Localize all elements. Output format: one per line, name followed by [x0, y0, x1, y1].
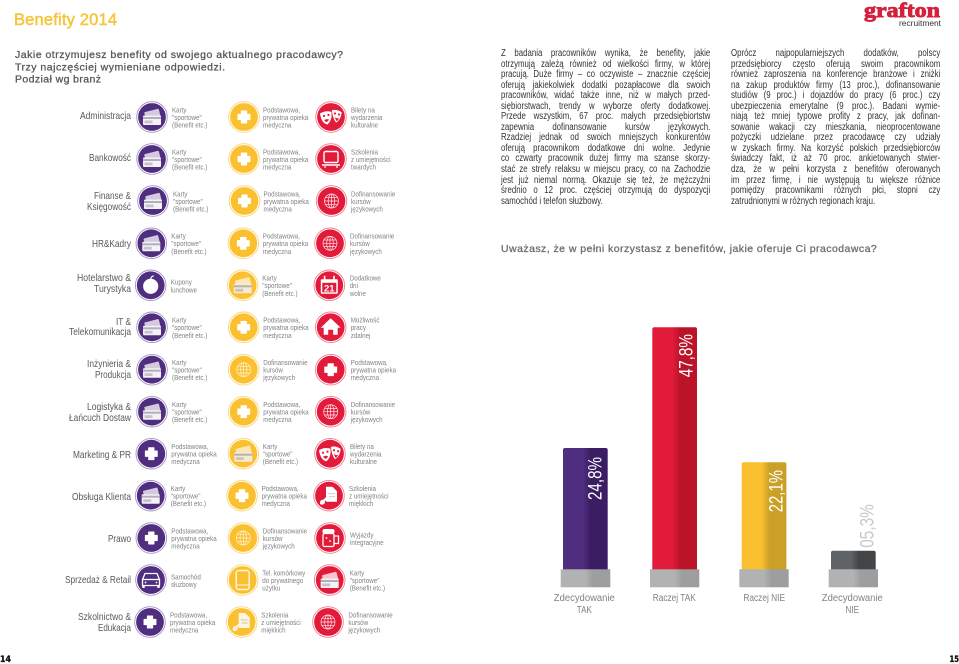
- row: HR&Kadry: [92, 228, 394, 259]
- row: Prawo: Wyjazdy: [350, 532, 374, 540]
- row: Administracja: Podstawowa,: [263, 107, 300, 114]
- bar: Zdecydowanie TAK 24,8%: TAK: [577, 605, 592, 616]
- heading: survey question: [15, 49, 343, 86]
- row: HR&Kadry: Podstawowa,: [263, 233, 300, 241]
- bar: Zdecydowanie NIE 05,3%: Zdecydowanie: [822, 593, 883, 604]
- row: HR&Kadry: medyczna: [263, 248, 291, 256]
- text block: additional benefits: w zyskach firmy. Na korzyść polskich przedsiębiorców: [731, 143, 940, 154]
- row: Sprzedaż & Retail: Sprzedaż & Retail: [65, 575, 131, 586]
- text block: company size findings: Rzadziej jednak od swoich mniejszych konkurentów: [501, 132, 710, 143]
- text block: additional benefits: pożyczki udzielane przez pracodawcę czy udziały: [731, 132, 940, 143]
- row: Marketing & PR: medyczna: [171, 459, 200, 466]
- row: Obsługa Klienta: [72, 480, 389, 511]
- row: Administracja: [80, 102, 383, 132]
- row: Administracja: wydarzenia: [350, 114, 383, 122]
- row: Sprzedaż & Retail: służbowy: [171, 582, 197, 589]
- row: Logistyka & Łańcuch Dostaw: Podstawowa,: [263, 402, 300, 409]
- bar: Zdecydowanie TAK 24,8%: Zdecydowanie: [554, 593, 615, 604]
- row: Logistyka & Łańcuch Dostaw: językowych: [350, 417, 383, 424]
- row: Obsługa Klienta: Karty: [171, 486, 186, 493]
- bar: Raczej NIE 22,1%: [739, 462, 789, 604]
- text block: company size findings: Przede wszystkim, 67 proc. małych przedsiębiortstw: [501, 111, 710, 122]
- row: Finanse & Księgowość: [87, 186, 395, 216]
- text block: company size findings: siębiorstwach, trendy w wyborze oferty dodatkowej.: [501, 101, 710, 112]
- row: Finanse & Księgowość: językowych: [350, 206, 383, 214]
- row: Bankowość: medyczna: [263, 164, 291, 172]
- row: Bankowość: z umiejętności: [351, 156, 391, 164]
- row: Prawo: integracyjne: [350, 540, 384, 547]
- row: Logistyka & Łańcuch Dostaw: Dofinansowanie: [351, 402, 395, 409]
- text block: additional benefits: na zakup produktów firmy (13 proc.), dofinansowanie: [731, 80, 940, 91]
- row: Hotelarstwo & Turystyka: "sportowe": [262, 283, 292, 290]
- text block: additional benefits: zatrudnionymi w różnych regionach kraju.: [731, 196, 875, 207]
- row: Inżynieria & Produkcja: kursów: [263, 367, 284, 375]
- row: Inżynieria & Produkcja: medyczna: [351, 375, 379, 382]
- row: Prawo: Podstawowa,: [171, 528, 208, 535]
- row: Prawo: językowych: [262, 543, 295, 551]
- row: Inżynieria & Produkcja: Karty: [172, 360, 187, 367]
- heading: chart question: Uważasz, że w pełni korzystasz z benefitów, jakie oferuje Ci pracodawca?: [501, 243, 877, 255]
- logo: grafton recruitment: recruitment: [899, 18, 942, 28]
- row: Hotelarstwo & Turystyka: dni: [350, 283, 358, 290]
- row: Szkolnictwo & Edukacja: kursów: [348, 619, 369, 627]
- heading: survey question: Jakie otrzymujesz benefity od swojego aktualnego pracodawcy?: [15, 49, 343, 61]
- row: Bankowość: Karty: [172, 149, 187, 156]
- bar: Raczej NIE 22,1%: 22,1%: [766, 470, 787, 512]
- row: Logistyka & Łańcuch Dostaw: kursów: [351, 409, 371, 417]
- row: Bankowość: (Benefit etc.): [172, 164, 207, 172]
- row: Prawo: prywatna opieka: [171, 535, 217, 543]
- row: Finanse & Księgowość: Księgowość: [87, 202, 131, 213]
- text block: additional benefits: ubezpieczenia emerytalne (9 proc.). Badani wymie-: [731, 101, 940, 112]
- row: Marketing & PR: wydarzenia: [349, 451, 382, 459]
- text block: company size findings: zapewnia dofinansowanie kursów językowych.: [501, 122, 710, 133]
- row: Bankowość: Bankowość: [89, 153, 131, 164]
- row: Finanse & Księgowość: Finanse &: [94, 191, 131, 202]
- row: Bankowość: "sportowe": [172, 156, 202, 164]
- row: Szkolnictwo & Edukacja: Dofinansowanie: [348, 612, 393, 619]
- row: Inżynieria & Produkcja: Inżynieria &: [87, 359, 131, 370]
- row: Szkolnictwo & Edukacja: z umiejętności: [261, 619, 301, 627]
- row: Bankowość: Szkolenia: [351, 149, 378, 156]
- row: Hotelarstwo & Turystyka: Hotelarstwo &: [77, 273, 131, 284]
- text block: additional benefits: im przez firmę, i nie występują tu większe różnice: [731, 175, 940, 186]
- row: Finanse & Księgowość: kursów: [351, 198, 372, 206]
- row: IT & Telekomunikacja: Karty: [172, 317, 187, 325]
- row: Administracja: kulturalne: [351, 122, 378, 130]
- row: IT & Telekomunikacja: medyczna: [263, 332, 292, 340]
- row: IT & Telekomunikacja: Możliwość: [351, 317, 380, 325]
- row: Administracja: Karty: [172, 107, 187, 114]
- row: Szkolnictwo & Edukacja: Podstawowa,: [170, 612, 207, 619]
- row: Logistyka & Łańcuch Dostaw: Logistyka &: [87, 402, 131, 413]
- row: Prawo: Prawo: [108, 534, 131, 545]
- row: HR&Kadry: językowych: [349, 248, 382, 256]
- row: Szkolnictwo & Edukacja: Szkolenia: [261, 612, 288, 619]
- row: Bankowość: [89, 144, 391, 174]
- text block: additional benefits: Oprócz najpopularniejszych dodatków, polscy: [731, 48, 940, 59]
- row: Hotelarstwo & Turystyka: Dodatkowe: [350, 275, 381, 283]
- row: Finanse & Księgowość: Dofinansowanie: [351, 191, 395, 198]
- row: Prawo: kursów: [263, 535, 283, 543]
- row: Bankowość: twardych: [351, 164, 376, 172]
- row: Prawo: Dofinansowanie: [263, 528, 307, 535]
- row: Marketing & PR: kulturalne: [350, 459, 377, 466]
- bar: Raczej TAK 47,8%: Raczej TAK: [653, 593, 696, 604]
- row: Szkolnictwo & Edukacja: Szkolnictwo &: [78, 612, 131, 623]
- text block: company size findings: oferują pracownikom dodatkowe dni wolne. Jedynie: [501, 143, 710, 154]
- row: Logistyka & Łańcuch Dostaw: "sportowe": [172, 409, 202, 417]
- row: Sprzedaż & Retail: (Benefit etc.): [350, 585, 385, 593]
- row: Inżynieria & Produkcja: Podstawowa,: [351, 360, 388, 367]
- title: Benefity 2014: [14, 11, 117, 29]
- row: Inżynieria & Produkcja: (Benefit etc.): [172, 375, 207, 382]
- row: Logistyka & Łańcuch Dostaw: [69, 396, 395, 427]
- row: Administracja: Bilety na: [351, 107, 375, 114]
- row: Obsługa Klienta: "sportowe": [171, 493, 201, 501]
- row: Szkolnictwo & Edukacja: medyczna: [170, 627, 198, 635]
- row: IT & Telekomunikacja: Podstawowa,: [263, 317, 300, 325]
- row: Marketing & PR: Podstawowa,: [171, 444, 208, 451]
- row: HR&Kadry: prywatna opieka: [263, 241, 308, 248]
- row: Marketing & PR: [73, 438, 382, 469]
- row: HR&Kadry: Karty: [171, 233, 186, 241]
- heading: survey question: Trzy najczęściej wymieniane odpowiedzi.: [15, 62, 225, 74]
- row: Sprzedaż & Retail: użytku: [262, 585, 280, 593]
- row: IT & Telekomunikacja: "sportowe": [172, 325, 202, 332]
- row: Inżynieria & Produkcja: językowych: [262, 375, 295, 382]
- row: HR&Kadry: kursów: [350, 241, 371, 248]
- row: Logistyka & Łańcuch Dostaw: Łańcuch Dostaw: [69, 413, 132, 424]
- row: Sprzedaż & Retail: Karty: [350, 570, 365, 577]
- bar: Zdecydowanie NIE 05,3%: NIE: [846, 605, 859, 616]
- row: Obsługa Klienta: Szkolenia: [349, 486, 376, 493]
- text block: company size findings: Z badania pracowników wynika, że benefity, jakie: [501, 48, 710, 59]
- row: Logistyka & Łańcuch Dostaw: medyczna: [263, 417, 292, 424]
- row: Marketing & PR: (Benefit etc.): [263, 459, 298, 466]
- row: Szkolnictwo & Edukacja: miękkich: [261, 627, 286, 635]
- logo: grafton recruitment: [864, 0, 942, 28]
- bar: Zdecydowanie NIE 05,3%: [822, 504, 883, 616]
- row: IT & Telekomunikacja: zdalnej: [351, 332, 371, 340]
- text block: company size findings: średnio o 12 proc. częściej otrzymują do dyspozycji: [501, 185, 710, 196]
- text block: company size findings: samochód i telefon służbowy.: [501, 196, 602, 207]
- text block: additional benefits: studiów (9 proc.) i dojazdów do pracy (6 proc.) czy: [731, 90, 940, 101]
- row: Marketing & PR: Bilety na: [350, 444, 374, 451]
- row: Bankowość: Podstawowa,: [263, 149, 300, 156]
- row: Obsługa Klienta: medyczna: [262, 501, 290, 508]
- text block: company size findings: oferują jakiekolwiek dodatki pozapłacowe dla swoich: [501, 80, 710, 91]
- row: Inżynieria & Produkcja: "sportowe": [172, 367, 202, 375]
- row: Prawo: medyczna: [171, 543, 200, 551]
- text block: company size findings: co czwarty pracownik dużej firmy ma szanse skorzy-: [501, 153, 710, 164]
- row: Inżynieria & Produkcja: prywatna opieka: [351, 367, 396, 375]
- bar: Raczej TAK 47,8%: 47,8%: [677, 334, 698, 377]
- row: Logistyka & Łańcuch Dostaw: (Benefit etc.): [172, 417, 207, 424]
- text block: company size findings: jest już niemal normą. Okazuje się też, że mężczyźni: [501, 175, 710, 186]
- text block: additional benefits: sowanie wakacji czy mieszkania, nieoprocentowane: [731, 122, 940, 133]
- row: Administracja: medyczna: [263, 122, 291, 130]
- text block: additional benefits: dza, że w pełni korzysta z benefitów oferowanych: [731, 164, 940, 175]
- text block: additional benefits: [731, 48, 940, 207]
- row: HR&Kadry: Dofinansowanie: [350, 233, 394, 241]
- row: Administracja: prywatna opieka: [263, 114, 308, 122]
- row: Szkolnictwo & Edukacja: prywatna opieka: [170, 619, 215, 627]
- row: Hotelarstwo & Turystyka: [77, 270, 381, 301]
- text block: company size findings: pracowników, widać także inne, niż w małych przed-: [501, 90, 710, 101]
- row: HR&Kadry: (Benefit etc.): [171, 248, 207, 256]
- bar: Raczej TAK 47,8%: [650, 327, 699, 604]
- row: HR&Kadry: HR&Kadry: [92, 239, 132, 250]
- row: Prawo: [108, 523, 384, 553]
- row: IT & Telekomunikacja: Telekomunikacja: [69, 327, 131, 338]
- row: HR&Kadry: "sportowe": [171, 241, 201, 248]
- row: Sprzedaż & Retail: Samochód: [171, 574, 201, 582]
- row: Administracja: Administracja: [80, 111, 131, 122]
- row: Finanse & Księgowość: prywatna opieka: [264, 198, 309, 206]
- row: Finanse & Księgowość: "sportowe": [173, 198, 203, 206]
- heading: survey question: Podział wg branż: [15, 74, 101, 86]
- row: Hotelarstwo & Turystyka: lunchowe: [171, 287, 197, 294]
- row: IT & Telekomunikacja: [69, 312, 380, 343]
- row: Obsługa Klienta: miękkich: [349, 501, 373, 508]
- text block: additional benefits: przedsiębiorcy często oferują swoim pracownikom: [731, 59, 940, 70]
- row: Bankowość: prywatna opieka: [263, 156, 308, 164]
- text block: additional benefits: pomiędzy pracownikami różnych płci, stopni czy: [731, 185, 940, 196]
- row: Marketing & PR: Karty: [263, 444, 278, 451]
- row: Administracja: (Benefit etc.): [172, 122, 207, 130]
- text block: additional benefits: świadczy fakt, iż aż 70 proc. ankietowanych stwier-: [731, 153, 940, 164]
- row: Finanse & Księgowość: Podstawowa,: [264, 191, 301, 198]
- row: Sprzedaż & Retail: "sportowe": [350, 577, 380, 585]
- text block: company size findings: pracują. Duże firmy – co oczywiste – znacznie częściej: [501, 69, 710, 80]
- row: Sprzedaż & Retail: Tel. komórkowy: [262, 570, 306, 577]
- bar: Zdecydowanie TAK 24,8%: 24,8%: [585, 457, 606, 500]
- row: IT & Telekomunikacja: IT &: [116, 317, 131, 328]
- row: Hotelarstwo & Turystyka: Kupony: [171, 279, 192, 287]
- row: Logistyka & Łańcuch Dostaw: prywatna opieka: [263, 409, 309, 417]
- row: Marketing & PR: "sportowe": [263, 451, 293, 459]
- bar chart: [554, 327, 883, 616]
- row: Hotelarstwo & Turystyka: Turystyka: [94, 284, 131, 295]
- row: Obsługa Klienta: prywatna opieka: [262, 493, 307, 501]
- row: Obsługa Klienta: Podstawowa,: [262, 486, 299, 493]
- text block: company size findings: [500, 48, 710, 207]
- row: Administracja: "sportowe": [172, 114, 202, 122]
- row: Inżynieria & Produkcja: Produkcja: [95, 370, 131, 381]
- text block: company size findings: otrzymują zależą również od wielkości firmy, w której: [501, 59, 710, 70]
- row: Finanse & Księgowość: medyczna: [264, 206, 292, 214]
- row: IT & Telekomunikacja: prywatna opieka: [263, 325, 309, 332]
- bar: Raczej NIE 22,1%: Raczej NIE: [743, 593, 785, 604]
- text block: additional benefits: również zaproszenia na konferencje branżowe i zniżki: [731, 69, 940, 80]
- row: Marketing & PR: Marketing & PR: [73, 450, 131, 461]
- row: Finanse & Księgowość: Karty: [173, 191, 188, 198]
- row: Sprzedaż & Retail: do prywatnego: [262, 577, 303, 585]
- row: Szkolnictwo & Edukacja: językowych: [348, 627, 380, 635]
- text block: additional benefits: niają też mniej typowe profity z pracy, jak dofinan-: [731, 111, 940, 122]
- row: Obsługa Klienta: (Benefit etc.): [171, 501, 206, 508]
- row: IT & Telekomunikacja: pracy: [351, 325, 366, 332]
- row: Inżynieria & Produkcja: Dofinansowanie: [263, 360, 308, 367]
- bar: Zdecydowanie NIE 05,3%: 05,3%: [857, 504, 878, 548]
- row: Szkolnictwo & Edukacja: Edukacja: [98, 623, 131, 634]
- row: Szkolnictwo & Edukacja: [78, 607, 393, 637]
- row: Hotelarstwo & Turystyka: wolne: [349, 290, 366, 298]
- row: Inżynieria & Produkcja: [87, 354, 396, 385]
- row: Hotelarstwo & Turystyka: (Benefit etc.): [262, 290, 298, 298]
- row: Hotelarstwo & Turystyka: Karty: [262, 275, 277, 283]
- row: Finanse & Księgowość: (Benefit etc.): [173, 206, 208, 214]
- row: Logistyka & Łańcuch Dostaw: Karty: [172, 402, 187, 409]
- text block: company size findings: stać ze strefy relaksu w miejscu pracy, co na Zachodzie: [501, 164, 710, 175]
- row: Sprzedaż & Retail: [65, 565, 385, 595]
- row: Obsługa Klienta: z umiejętności: [349, 493, 389, 501]
- row: Marketing & PR: prywatna opieka: [171, 451, 217, 459]
- bar: Zdecydowanie TAK 24,8%: [554, 448, 615, 616]
- row: Obsługa Klienta: Obsługa Klienta: [72, 492, 131, 503]
- row: IT & Telekomunikacja: (Benefit etc.): [172, 332, 207, 340]
- icon: calendar: 21: [324, 283, 335, 294]
